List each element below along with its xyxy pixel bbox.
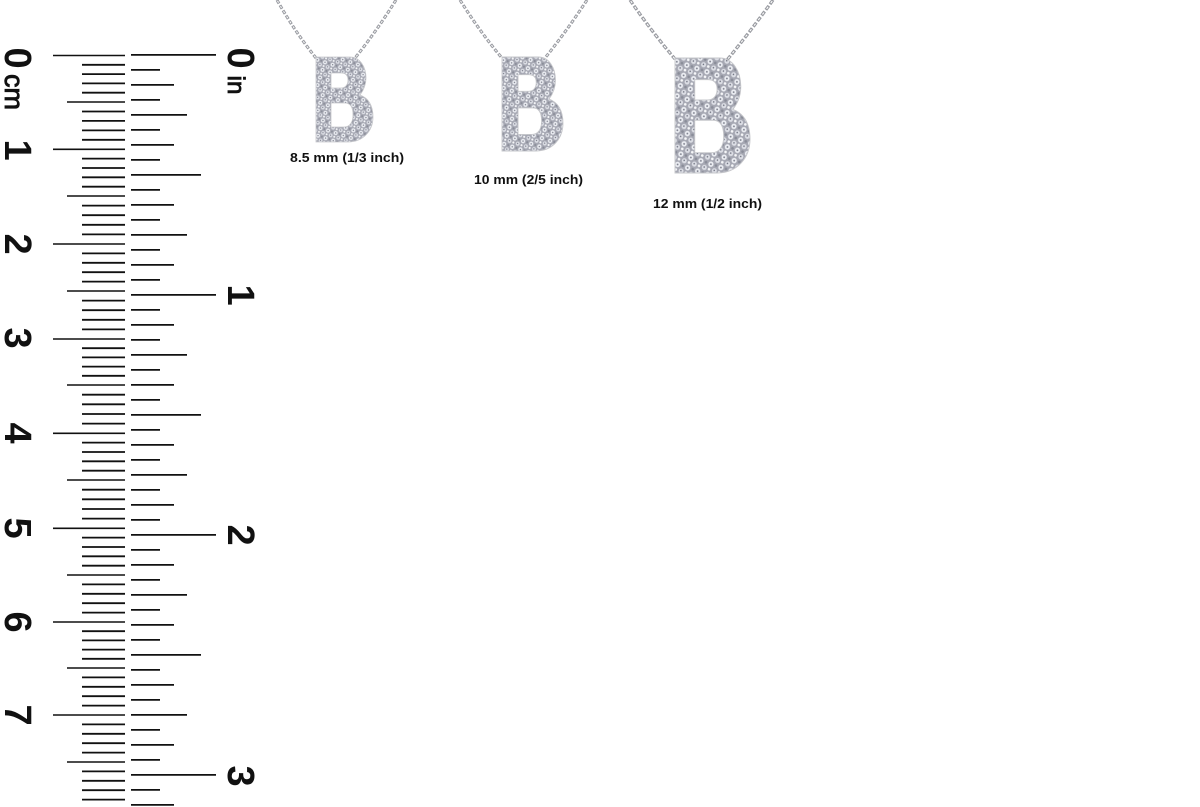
label: 8.5 mm: 8.5 mm (1/3 inch) bbox=[290, 150, 404, 165]
label: 12 mm: 12 mm (1/2 inch) bbox=[653, 196, 762, 211]
inch scale labels: in bbox=[222, 76, 249, 94]
centimetre scale labels bbox=[0, 47, 38, 726]
panel: inch ruler scale bbox=[146, 54, 208, 807]
pendant: 10 mm letter B bbox=[460, 0, 587, 151]
panel: centimetre ruler scale bbox=[53, 56, 125, 800]
inch scale labels bbox=[219, 47, 261, 787]
label: 10 mm: 10 mm (2/5 inch) bbox=[474, 172, 583, 187]
inch scale labels: 3 bbox=[219, 765, 261, 787]
pendant: 12 mm letter B bbox=[630, 0, 773, 173]
inch scale labels: 1 bbox=[219, 284, 261, 306]
inch scale labels: 2 bbox=[219, 524, 261, 546]
pendant: 8.5 mm letter B bbox=[277, 0, 396, 142]
inch scale labels: 0 bbox=[219, 47, 261, 69]
